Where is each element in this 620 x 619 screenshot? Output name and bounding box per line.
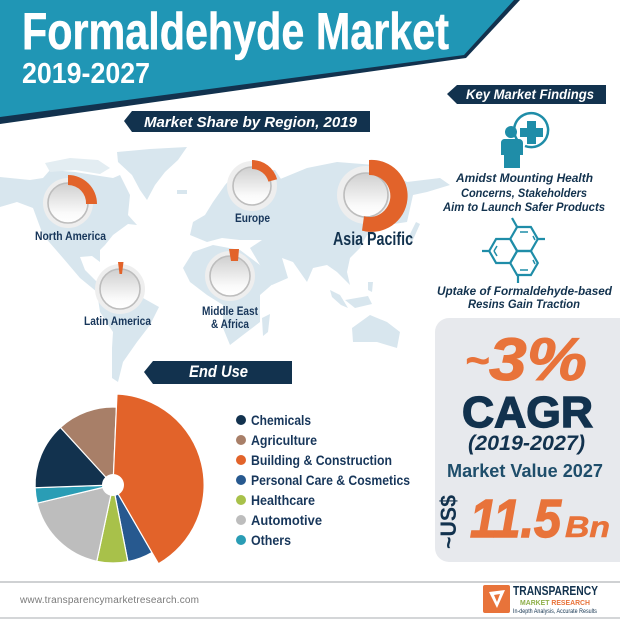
donut: Middle East and Africa: Middle East [202,304,258,318]
world map background [0,147,450,382]
logo: Transparency Market Research: MARKET RESEARCH [520,598,590,607]
donut: Europe: Europe [235,211,270,225]
donut: Middle East and Africa [202,249,258,331]
CAGR percentage: ~ [465,339,489,383]
CAGR percentage: 3% [489,326,587,393]
finding text: health concerns: Aim to Launch Safer Products [442,200,605,214]
donut: Asia Pacific [333,160,413,249]
subtitle: 2019-2027 [22,58,150,90]
heading: end use: End Use [189,362,248,381]
main title: Formaldehyde Market [22,3,449,61]
footer [0,581,620,619]
donut: Europe [227,160,277,225]
logo: Transparency Market Research: TRANSPARENCY [513,584,599,598]
finding text: resins: Resins Gain Traction [468,297,580,311]
heading: market share by region: Market Share by Region, 2019 [144,114,358,131]
title banner [0,0,520,124]
donut: Asia Pacific: Asia Pacific [333,229,413,249]
finding text: health concerns [442,171,605,214]
website address: www.transparencymarketresearch.com [19,595,199,606]
legend: end use [236,412,410,548]
finding text: health concerns: Amidst Mounting Health [455,171,593,185]
heading: end use [144,361,292,384]
market value number: 11.5 [470,489,562,549]
CAGR label: CAGR [462,388,593,437]
market value unit: Bn [565,511,610,544]
legend item: automotive: Automotive [251,512,322,528]
finding text: health concerns: Concerns, Stakeholders [461,186,587,200]
legend item: others [236,532,291,548]
pie chart: end use [35,394,204,564]
logo: Transparency Market Research: In-depth Analysis, Accurate Results [513,609,597,615]
donut: Middle East and Africa: & Africa [211,317,249,331]
finding text: resins: Uptake of Formaldehyde-based [437,284,613,298]
legend item: chemicals: Chemicals [251,412,311,428]
panel: CAGR and market value [435,318,620,562]
legend item: agriculture: Agriculture [251,432,317,448]
legend item: healthcare: Healthcare [251,492,315,508]
donut: Latin America [84,262,151,328]
icon: molecule [482,218,545,283]
heading: key market findings: Key Market Findings [466,86,594,102]
heading: market share by region [124,111,370,132]
icon: person with medical cross [501,113,548,168]
donut: Latin America: Latin America [84,314,151,328]
market value label: Market Value 2027 [447,461,603,481]
legend item: personal care and cosmetics: Personal Care & Cosmetics [251,472,410,488]
finding text: resins [437,284,613,311]
legend item: building and construction: Building & Construction [251,452,392,468]
currency label: ~US$ [436,495,461,549]
CAGR period: (2019-2027) [468,432,585,455]
logo: Transparency Market Research [483,584,599,615]
legend item: others: Others [251,532,291,548]
donut: North America [35,175,106,243]
donut: North America: North America [35,229,106,243]
